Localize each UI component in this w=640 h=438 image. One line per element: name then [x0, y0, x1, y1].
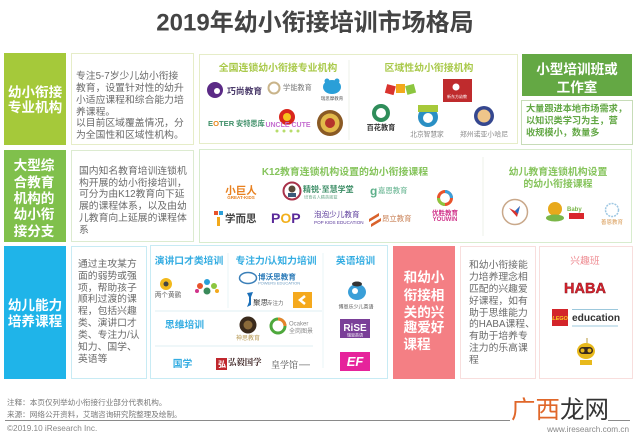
header: small studios: 工作室 — [557, 79, 597, 95]
text block: interest description: 有助于培养专 — [469, 329, 528, 342]
text block: interest description: 好课程，如有 — [469, 294, 528, 307]
logo: blue monster — [321, 78, 344, 102]
logo: tiger baby — [546, 202, 584, 222]
heading: speech training: 演讲口才类培训 — [155, 254, 223, 267]
label: large education groups: 幼小衔 — [14, 206, 55, 222]
logo: Ocaker: 全岗图景 — [289, 327, 313, 335]
logo: POP: POP — [271, 210, 301, 226]
logo: Xueneng: 学能教育 — [283, 83, 312, 92]
label: large education groups: 机构的 — [14, 190, 54, 206]
text block: specialist description — [72, 54, 194, 144]
text block: large groups description — [72, 150, 194, 242]
footer note: 注释：本页仅列举幼小衔接行业部分代表机构。 — [7, 397, 166, 407]
logo: colourful hand — [195, 279, 219, 294]
logo: Jusi attention: 专注力 — [267, 299, 284, 307]
logo: round brown badge — [317, 110, 343, 136]
logo: HABA: HABA — [564, 281, 606, 297]
logo: Angli: 昂立教育 — [382, 214, 412, 223]
text block: interest description: 助于思维能力 — [469, 306, 528, 319]
text block: ability description: 类、演讲口才 — [78, 316, 137, 329]
logo: Bowosi — [240, 272, 300, 286]
label: large education groups — [4, 150, 66, 242]
panel: specialist logos — [200, 54, 518, 144]
logo: Weilai monster — [338, 282, 374, 310]
text block: interest description: 的HABA课程、 — [469, 317, 535, 330]
logo: Baihua: 百花教育 — [367, 123, 395, 132]
logo: tiger baby: Baby — [567, 207, 582, 213]
logo: Jiaen: 嘉恩教育 — [378, 186, 408, 195]
logo: Youwin: YOUWIN — [433, 217, 457, 223]
logo: EF: EF — [347, 354, 364, 369]
logo: Shensi — [236, 316, 260, 342]
logo: Xueersi — [214, 211, 257, 226]
text block: specialist description: 专注5-7岁少儿幼小衔接 — [76, 69, 179, 82]
logo: Jingrui: 培育名人精英摇篮 — [304, 194, 338, 200]
footer note — [7, 397, 182, 419]
logo: Xueneng — [268, 82, 312, 94]
copyright: ©2019.10 iResearch Inc. — [7, 424, 97, 433]
logo: LEGO education: LEGO — [552, 316, 569, 322]
text block: ability description: 程，包括兴趣 — [78, 304, 137, 317]
label: ability courses: 幼儿能力 — [8, 297, 62, 313]
text block: ability description — [72, 246, 146, 378]
text block: ability description: 类、专注力/认 — [78, 328, 140, 341]
logo: Enter — [208, 119, 265, 128]
label: ability courses: 培养课程 — [8, 313, 63, 329]
label: large education groups: 接分支 — [14, 223, 55, 239]
heading: national chains: 全国连锁幼小衔接专业机构 — [219, 61, 337, 74]
logo: Liangge Huangli: 两个黄鹂 — [155, 290, 182, 299]
header: small studios: 小型培训班或 — [536, 61, 618, 77]
text block: small studios description: 收规模小，数量多 — [526, 126, 600, 138]
heading: interest classes: 兴趣班 — [570, 254, 600, 267]
website: www.iresearch.com.cn — [546, 425, 629, 434]
text block: specialist description: 为全国性和区域性机构。 — [76, 128, 184, 141]
text block: interest description: 力培养理念相 — [469, 270, 528, 283]
logo: Zhengzhou Noah — [460, 106, 508, 138]
text block: interest description: 注力的乐高课 — [469, 341, 528, 354]
text block: interest description: 匹配的兴趣爱 — [469, 282, 528, 295]
logo: round seal — [502, 200, 528, 224]
logo: Bowosi: 博沃思教育 — [258, 272, 296, 282]
logo: Huangxueguan: 皇学馆 — [271, 359, 298, 370]
text block: specialist description: 教育，设置针对性的幼升 — [76, 81, 184, 94]
logo: Jiaen: g — [370, 184, 377, 198]
label: interest courses: 关的兴 — [404, 304, 445, 320]
heading: K12 courses: K12教育连锁机构设置的幼小衔接课程 — [262, 165, 428, 178]
panel: group logos — [200, 150, 632, 242]
text block: interest description: 程 — [469, 354, 479, 366]
label: ability courses — [4, 246, 66, 379]
label: specialist institutions: 专业机构 — [8, 99, 62, 115]
text block: large groups description: 展的课程体系，以及由幼 — [79, 199, 187, 212]
logo: RISE — [340, 319, 370, 338]
text block: large groups description: 可分为由K12教育向下延 — [79, 187, 185, 200]
logo: Bowosi: POWERS EDUCATION — [258, 280, 300, 286]
text block: specialist description: 以目前区域覆盖情况，分 — [76, 116, 184, 129]
logo: Great Kids: GREAT-KIDS — [227, 195, 255, 200]
label: large education groups: 大型综 — [14, 157, 55, 173]
logo: Youwin — [432, 192, 458, 223]
logo: Jingrui: 精锐·至慧学堂 — [303, 184, 354, 194]
logo: Qiaoshang — [207, 82, 262, 98]
text block: small studios description — [522, 100, 632, 144]
heading: thinking training: 思维培训 — [165, 318, 204, 331]
logo: flower — [385, 84, 416, 95]
heading: Chinese studies: 国学 — [173, 357, 192, 370]
logo: Hongyi guoxue: 弘毅国学 — [228, 357, 262, 367]
logo: LEGO education: education — [572, 313, 620, 324]
text block: large groups description: 国内知名教育培训连锁机 — [79, 164, 187, 177]
title: 2019年幼小衔接培训市场格局 — [156, 10, 474, 36]
row: specialist institutions — [4, 53, 632, 145]
panel: ability logos — [150, 246, 388, 378]
header: small studios — [522, 54, 632, 96]
logo: LEGO education — [552, 309, 620, 326]
logo: orange square — [293, 292, 312, 308]
logo: Jingrui — [284, 182, 354, 200]
footer note: 来源：网络公开资料，艾瑞咨询研究院整理及绘制。 — [7, 409, 182, 419]
logo: Weilai monster: 博恩乐少儿英语 — [338, 304, 374, 310]
text block: ability description: 项，帮助孩子 — [78, 281, 137, 294]
logo: Beijing Zhihuijia: 北京智慧家 — [410, 130, 444, 138]
logo: Uncle lion: UNCLE CUTE — [265, 122, 311, 129]
label: interest courses — [393, 246, 455, 379]
text block: ability description: 通过主攻某方 — [78, 257, 137, 270]
logo: Huangxueguan — [271, 359, 310, 370]
text block: ability description: 顺利过渡的课 — [78, 292, 137, 305]
text block: interest description — [460, 246, 536, 378]
logo: Hongyi guoxue — [216, 357, 262, 370]
label: interest courses: 和幼小 — [404, 269, 445, 285]
logo: Baihua — [367, 104, 395, 132]
text block: large groups description: 系 — [79, 224, 89, 236]
row: ability courses — [4, 246, 388, 379]
panel: small studios — [522, 54, 632, 144]
logo: Great Kids: 小巨人 — [225, 184, 257, 197]
logo: Shanen: 善恩教育 — [601, 218, 623, 226]
logo: POP Kids: POP KIDS EDUCATION — [314, 220, 364, 225]
logo: Beijing Zhihuijia — [410, 105, 444, 138]
label: specialist institutions: 幼小衔接 — [8, 84, 63, 100]
text block: ability description: 英语等 — [78, 352, 108, 365]
logo: Angli — [369, 213, 412, 227]
label: interest courses: 衔接相 — [404, 288, 444, 303]
heading: attention training: 专注力/认知力培训 — [235, 254, 317, 267]
logo: EF — [340, 352, 370, 371]
logo: blue monster: 瑞思摩教育 — [321, 95, 344, 102]
label: interest courses: 课程 — [403, 337, 431, 352]
logo: Hongyi guoxue: 弘 — [218, 359, 226, 369]
logo: Jiaen — [370, 184, 408, 198]
row: interest courses — [393, 246, 632, 379]
label: specialist institutions — [4, 53, 66, 145]
logo: Ocaker — [271, 319, 313, 335]
panel: interest logos — [540, 246, 632, 378]
logo: Ocaker: Ocaker — [289, 322, 308, 328]
label: large education groups: 合教育 — [14, 174, 54, 190]
heading: English training: 英语培训 — [336, 254, 375, 267]
logo: POP Kids: 泡泡少儿教育 — [314, 209, 360, 219]
logo: Jusi attention: 聚思 — [253, 298, 269, 307]
heading: regional institutions: 区域性幼小衔接机构 — [385, 61, 474, 74]
row: large education groups — [4, 150, 632, 242]
logo: Qiaoshang: 巧尚教育 — [227, 85, 262, 96]
logo: Uncle lion — [265, 109, 311, 132]
logo: Shanen — [601, 204, 623, 226]
text block: large groups description: 儿教育向上延展的课程体 — [79, 211, 187, 224]
logo: RISE: 瑞思英语 — [347, 332, 363, 338]
label: interest courses: 趣爱好 — [404, 319, 445, 335]
text block: specialist description: 养课程。 — [76, 105, 115, 118]
logo: robot — [577, 338, 595, 365]
logo: Liangge Huangli — [155, 278, 182, 299]
text block: specialist description: 小适应课程和综合能力培 — [76, 93, 184, 106]
text block: ability description: 知力、国学、 — [78, 340, 137, 353]
logo: Shensi: 神思教育 — [236, 334, 260, 342]
logo: POP Kids — [314, 209, 364, 225]
logo: Enter: EOTER — [208, 119, 235, 128]
heading: early education courses: 的幼小衔接课程 — [523, 177, 593, 190]
text block: small studios description: 大量跟进本地市场需求， — [526, 102, 627, 114]
logo: Xueersi: 学而思 — [225, 212, 257, 225]
text block: ability description: 面的弱势或强 — [78, 269, 137, 282]
watermark: 广西龙网 — [511, 396, 609, 424]
logo: Jusi attention — [247, 292, 284, 307]
text block: large groups description: 构开展的幼小衔接培训， — [79, 176, 187, 189]
logo: Zhengzhou Noah: 郑州诺亚小哈尼 — [460, 130, 508, 138]
heading: early education courses: 幼儿教育连锁机构设置 — [509, 165, 607, 178]
text block: interest description: 和幼小衔接能 — [469, 258, 528, 271]
text block: small studios description: 以知识类学习为主，营 — [526, 114, 618, 126]
logo: Enter: 安特思库 — [236, 119, 265, 128]
logo: red square — [443, 79, 472, 102]
logo: Youwin: 优胜教育 — [432, 208, 458, 217]
logo: red square: 新东方幼教 — [447, 93, 467, 99]
logo: RISE: RiSE — [343, 323, 367, 334]
